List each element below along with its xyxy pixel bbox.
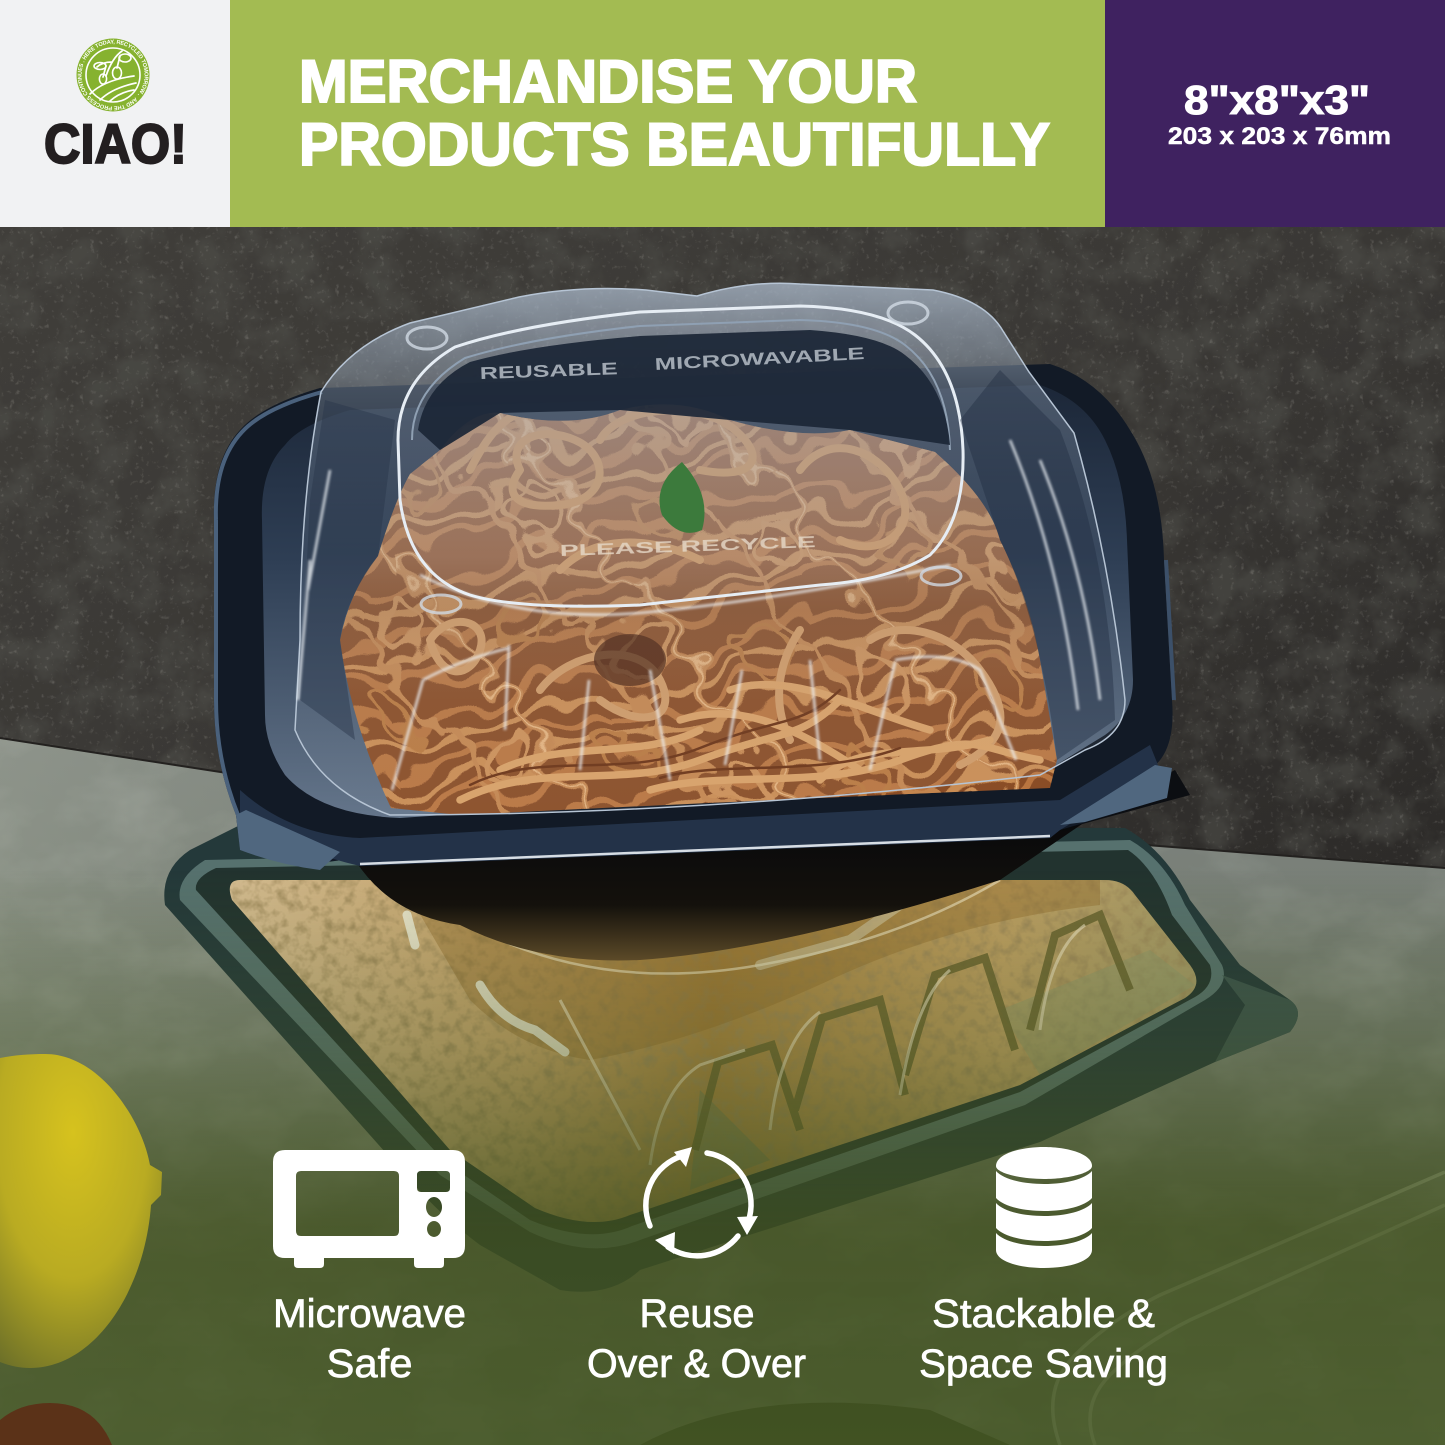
label: Stackable & xyxy=(932,1292,1155,1336)
dimensions in inches: 8"x8"x3" xyxy=(1184,77,1370,123)
label: Over & Over xyxy=(587,1342,806,1386)
reflected lid glare xyxy=(407,870,950,1052)
label xyxy=(919,1292,1168,1386)
header: purple dimensions panel xyxy=(1105,0,1445,227)
embossed lid text: MICROWAVABLE xyxy=(654,344,865,374)
reflected food mound xyxy=(230,880,1196,1222)
lid ribs xyxy=(298,440,1100,790)
icon: circular arrows xyxy=(646,1147,758,1256)
header: logo panel xyxy=(0,0,230,227)
dimensions in millimetres: 203 x 203 x 76mm xyxy=(1168,123,1391,150)
lid stud holes xyxy=(407,302,961,613)
reflected lid ribs xyxy=(695,915,1130,1150)
lid top face xyxy=(398,306,963,606)
dark colour overlay fading photo to green xyxy=(0,870,1445,1445)
upper noodles washed by lid xyxy=(348,410,1031,628)
label: Space Saving xyxy=(919,1342,1168,1386)
embossed lid text xyxy=(479,344,865,560)
feature: microwave safe xyxy=(273,1150,466,1386)
label: Safe xyxy=(326,1342,412,1386)
dark far wall seen through lid xyxy=(418,330,950,450)
corner tabs xyxy=(236,810,340,870)
label xyxy=(273,1292,466,1386)
reflected open tray on counter xyxy=(164,825,1298,1292)
label: Microwave xyxy=(273,1292,466,1336)
noodles xyxy=(340,404,1057,814)
tray rim xyxy=(214,364,1173,866)
feature: stackable xyxy=(919,1147,1168,1386)
logo badge: AND THE PROCESS CONTINUES . HERE TODAY, RECYCLED TOMORROW . xyxy=(78,40,148,110)
icon: stack of discs xyxy=(996,1147,1092,1268)
embossed lid text: REUSABLE xyxy=(479,359,618,383)
label xyxy=(587,1292,806,1386)
food container on top of stack xyxy=(214,283,1190,961)
clear lid body xyxy=(295,283,1125,815)
feature: reuse xyxy=(587,1147,806,1386)
container base shadow xyxy=(355,822,1085,961)
icon: microwave xyxy=(273,1150,465,1268)
title xyxy=(299,48,1050,178)
title: MERCHANDISE YOUR xyxy=(299,48,917,115)
lid side tint xyxy=(960,370,1115,760)
tray inner floor xyxy=(262,385,1133,818)
label: Reuse xyxy=(640,1292,754,1336)
reflected tray tab xyxy=(1215,975,1298,1062)
second container, bottom right corner xyxy=(640,1172,1445,1445)
brand name: CIAO! xyxy=(44,112,187,175)
title: PRODUCTS BEAUTIFULLY xyxy=(299,111,1050,178)
header: green title panel xyxy=(230,0,1105,227)
dark meatball gap xyxy=(594,634,666,686)
tomato xyxy=(0,1403,112,1445)
embossed lid text: PLEASE RECYCLE xyxy=(560,534,817,560)
mint leaf xyxy=(660,462,704,533)
lemon xyxy=(0,1054,162,1368)
tray front band xyxy=(240,745,1160,866)
